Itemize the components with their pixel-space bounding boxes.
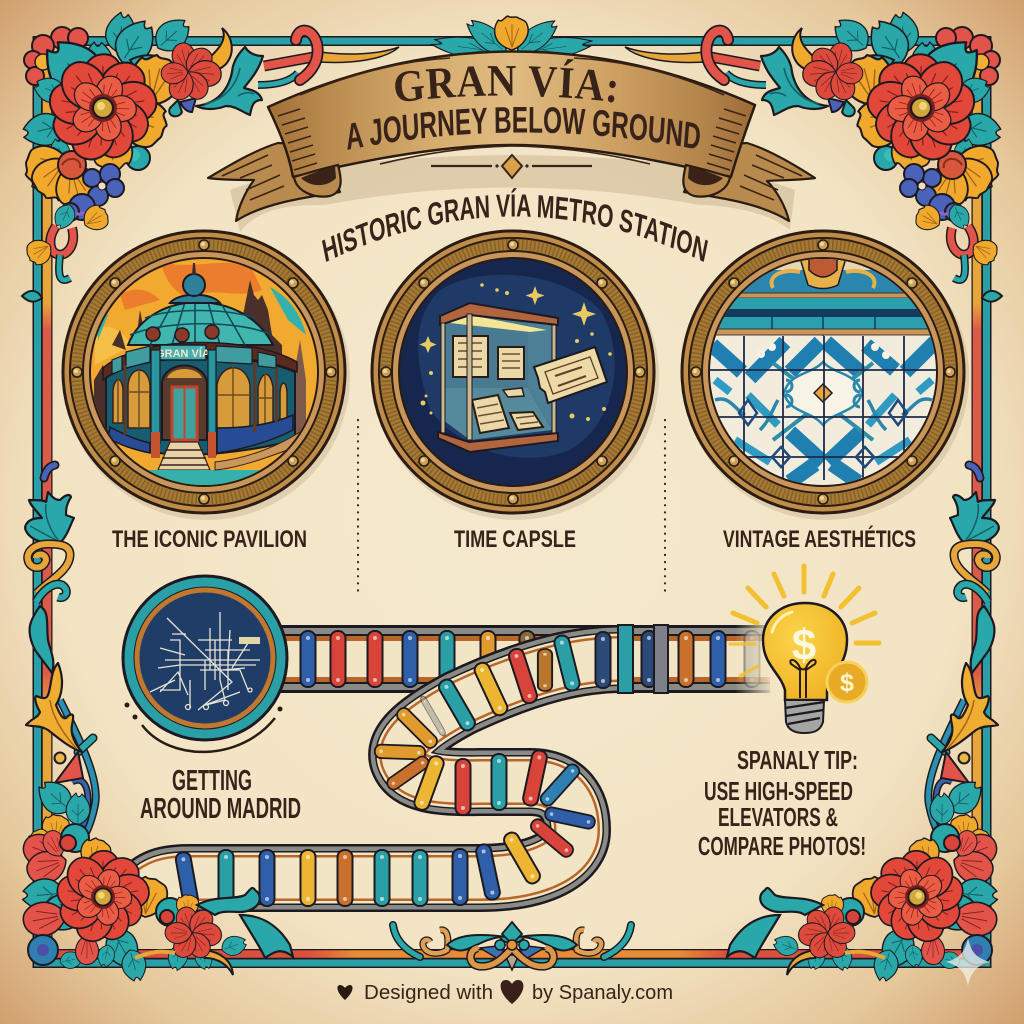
corner flowers bottom right: [727, 774, 1001, 984]
bottom centre ornament: [393, 922, 631, 970]
ribbon hatch left: [222, 109, 317, 200]
track end with signal bars: [618, 622, 770, 696]
ribbon band: [268, 51, 755, 177]
top centre ornament: [431, 14, 593, 63]
dotted divider left: [357, 420, 359, 592]
ribbon right tail: [684, 143, 815, 221]
ribbon left tail: [208, 143, 340, 221]
ribbon title line one: GRAN VÍA:: [395, 59, 616, 102]
corner flowers bottom left: [19, 774, 293, 984]
callout: spanaly tip: USE HIGH-SPEED: [704, 776, 853, 806]
dotted divider right: [664, 420, 666, 592]
pavilion illustration: [90, 258, 320, 490]
icon: light bulb with coin: [733, 566, 879, 733]
ribbon hatch right: [707, 109, 802, 200]
arc under map: [142, 718, 275, 752]
title ribbon: [206, 50, 816, 232]
footer credit: by Spanaly.com: [532, 982, 673, 1004]
panel: time capsule medallion: [372, 231, 659, 520]
ribbon right fold: [688, 166, 723, 185]
winding metro track: [150, 632, 622, 909]
label: getting around madrid: [140, 765, 301, 825]
label: time capsule: TIME CAPSLE: [454, 526, 576, 553]
sparkle mark: [946, 938, 990, 986]
icon: light bulb with coin: $: [840, 669, 854, 697]
panel: metro map medallion: [123, 576, 287, 752]
label: getting around madrid: GETTING: [172, 765, 252, 797]
ribbon right roll: [683, 165, 730, 197]
ribbon shadow: [230, 155, 795, 232]
footer credit: Designed with: [364, 982, 493, 1004]
small diamond divider: [431, 155, 592, 178]
panel: iconic pavilion medallion: [63, 231, 350, 520]
ribbon left fold: [301, 166, 336, 185]
panel: vintage tiles medallion: [682, 231, 969, 520]
side ornaments right: [928, 465, 999, 835]
ribbon inner lines: [300, 58, 724, 164]
tile illustration: [705, 255, 941, 490]
pavilion illustration: GRAN VÍA: [156, 347, 210, 360]
ribbon title line two: A JOURNEY BELOW GROUND: [347, 107, 700, 150]
callout: spanaly tip: ELEVATORS &: [718, 802, 838, 832]
straight metro track: [280, 625, 770, 693]
ribbon left roll: [294, 165, 341, 197]
corner flowers top left: [20, 11, 399, 302]
icon: light bulb with coin: $: [792, 621, 816, 670]
time capsule illustration: [395, 255, 635, 490]
callout: spanaly tip: SPANALY TIP:: [737, 745, 858, 775]
label: the iconic pavilion: THE ICONIC PAVILION: [112, 526, 307, 553]
side ornaments left: [25, 465, 96, 835]
arched subtitle: HISTORIC GRAN VÍA METRO STATION: [322, 188, 708, 262]
callout: spanaly tip: COMPARE PHOTOS!: [698, 831, 866, 861]
label: vintage aesthetics: VINTAGE AESTHÉTICS: [723, 525, 916, 553]
label: getting around madrid: AROUND MADRID: [140, 793, 301, 825]
corner flowers top right: [625, 11, 1004, 302]
footer credit: [337, 980, 673, 1004]
subway map lines: [150, 612, 260, 710]
callout: spanaly tip: [698, 745, 866, 861]
